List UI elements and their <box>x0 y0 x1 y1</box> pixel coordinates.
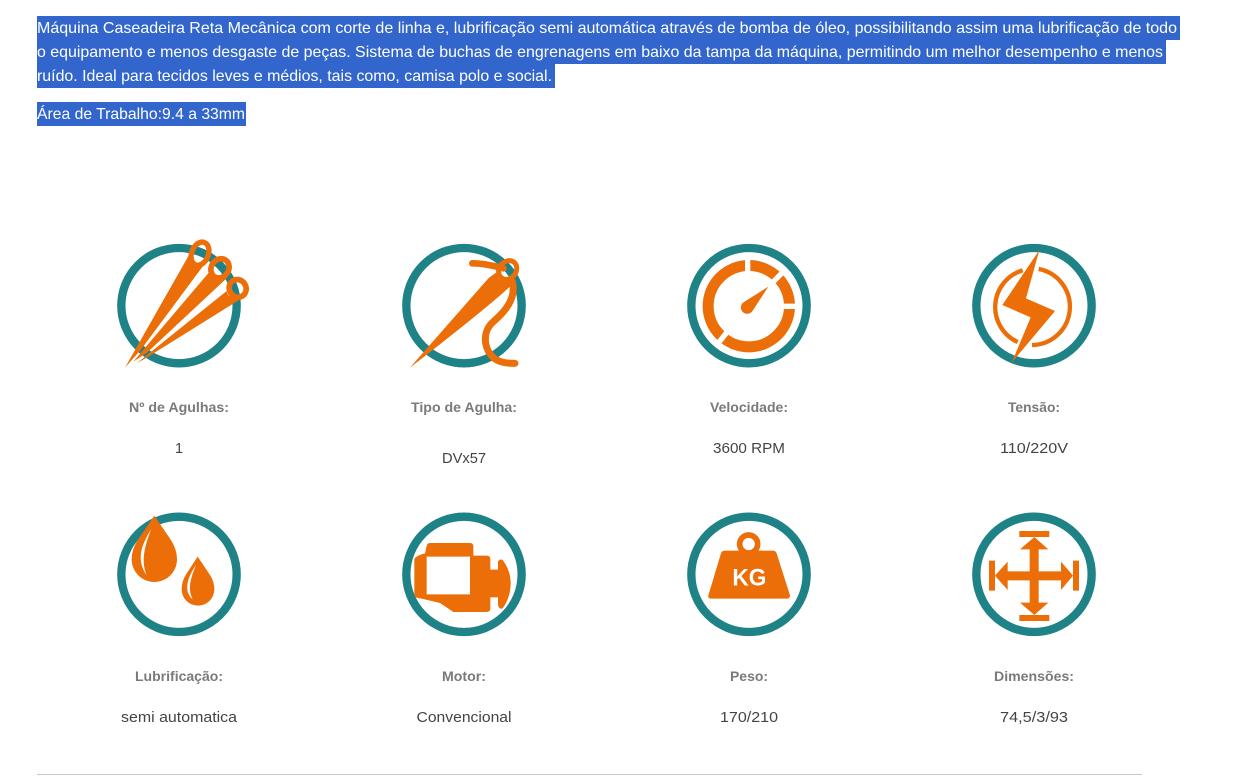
description text block: Máquina Caseadeira Reta Mecânica com corte de linha e, lubrificação semi automática através de bomba de óleo, possibilitando assim uma lubrificação de todo <box>37 20 1177 37</box>
value: 3600 RPM <box>713 441 785 457</box>
spec: voltage <box>976 248 1092 457</box>
icon: lightning bolt <box>976 248 1092 363</box>
value: 170/210 <box>720 710 778 726</box>
working area text: Área de Trabalho:9.4 a 33mm <box>37 104 245 123</box>
description text block: o equipamento e menos desgaste de peças. Sistema de buchas de engrenagens em baixo da tampa da máquina, permitindo um melhor desempenho e menos <box>37 44 1163 61</box>
description text block: ruído. Ideal para tecidos leves e médios, tais como, camisa polo e social. <box>37 68 552 85</box>
spec: speed <box>691 248 807 457</box>
spec: number of needles <box>121 239 249 457</box>
icon: three needles <box>121 239 249 368</box>
spec: motor <box>406 517 522 726</box>
value: 74,5/3/93 <box>1000 710 1068 726</box>
icon: four-way arrows <box>976 517 1092 632</box>
label: Nº de Agulhas: <box>129 399 229 415</box>
spec: lubrication <box>121 516 238 726</box>
value: DVx57 <box>442 451 486 467</box>
value: 1 <box>175 441 183 457</box>
label: Tensão: <box>1008 399 1060 415</box>
spec: dimensions <box>976 517 1092 726</box>
spec: weight <box>691 517 807 726</box>
spec: needle type <box>406 248 522 467</box>
icon: speed gauge <box>691 248 807 363</box>
icon: kg weight: KG <box>732 565 766 592</box>
label: Lubrificação: <box>135 668 223 684</box>
icon: oil drops <box>121 516 237 632</box>
icon: engine <box>406 517 522 632</box>
label: Motor: <box>442 668 486 684</box>
icon: kg weight <box>691 517 807 632</box>
description text block <box>37 16 1180 88</box>
value: 110/220V <box>1000 441 1068 457</box>
label: Peso: <box>730 668 768 684</box>
value: semi automatica <box>121 710 238 726</box>
icon: threaded needle <box>406 248 522 368</box>
label: Tipo de Agulha: <box>411 399 517 415</box>
label: Velocidade: <box>710 399 788 415</box>
label: Dimensões: <box>994 668 1074 684</box>
value: Convencional <box>416 710 512 726</box>
